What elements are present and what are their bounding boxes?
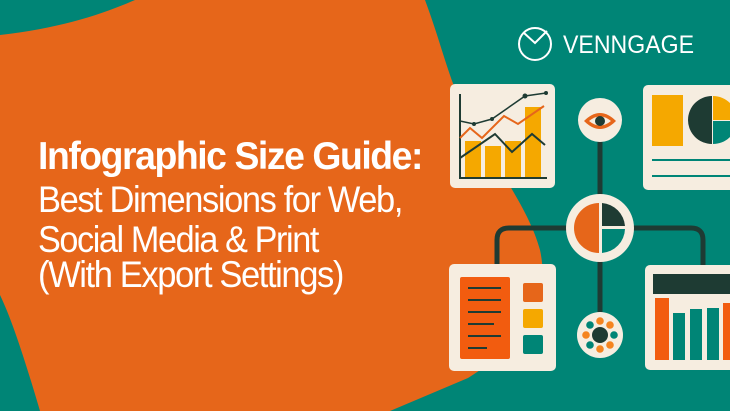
title xyxy=(38,135,422,295)
icon: eye xyxy=(578,98,622,142)
panel: line and bar chart xyxy=(450,84,555,188)
logo: venngage xyxy=(519,28,694,60)
logo: venngage: VENNGAGE xyxy=(563,31,694,59)
title: Infographic Size Guide: xyxy=(38,135,422,178)
title: Social Media & Print xyxy=(38,219,320,260)
connectors xyxy=(497,142,703,312)
title: (With Export Settings) xyxy=(38,254,343,295)
icon: dots ring xyxy=(577,312,623,358)
panel: bar chart card xyxy=(645,265,730,370)
icon: center pie xyxy=(566,194,634,262)
title: Best Dimensions for Web, xyxy=(38,179,402,220)
orange blob background xyxy=(0,0,543,411)
panel: pie chart card xyxy=(643,85,730,190)
panel: text list card xyxy=(449,264,556,371)
